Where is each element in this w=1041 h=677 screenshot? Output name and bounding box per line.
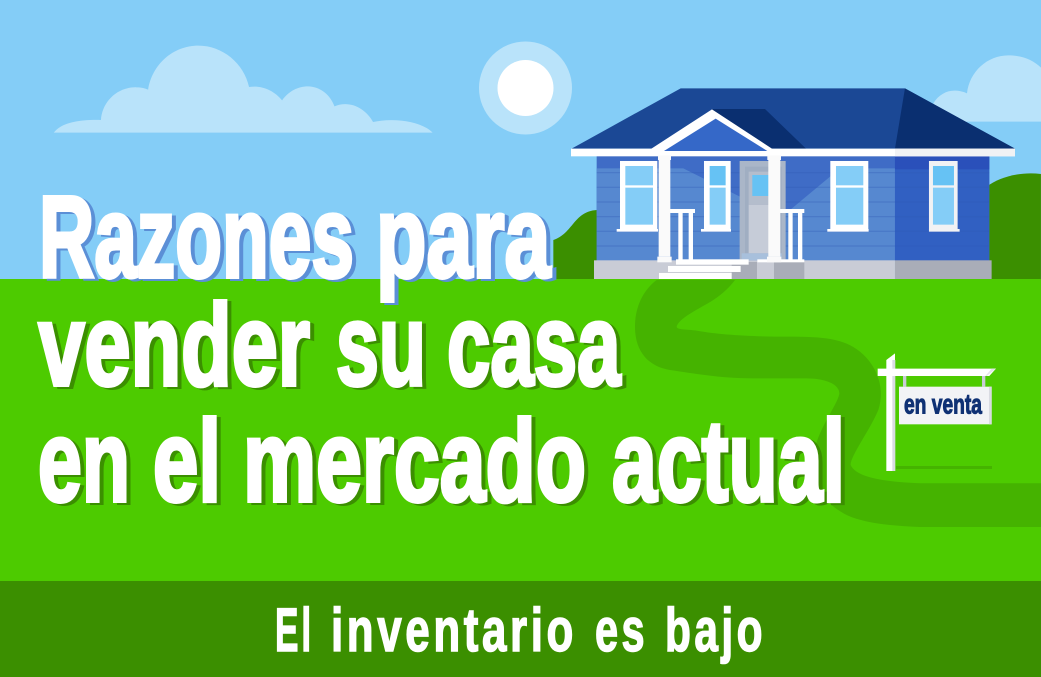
bottom band	[0, 581, 1041, 677]
title line 3: en	[38, 396, 130, 526]
title line 3: mercado	[243, 396, 586, 526]
title line 3: el	[153, 396, 221, 526]
title line 1: para	[376, 172, 552, 302]
door	[740, 161, 786, 260]
window 3	[827, 161, 869, 232]
foundation	[594, 260, 895, 280]
subtitle: inventario	[331, 596, 577, 664]
subtitle: El	[275, 596, 314, 664]
sign post	[886, 353, 895, 471]
window 1	[617, 161, 658, 232]
title line 1: Razones	[39, 172, 354, 302]
sky background	[0, 0, 1041, 280]
title line 2: su	[336, 280, 426, 410]
cloud: left	[54, 46, 433, 133]
for-sale sign	[878, 353, 996, 471]
subtitle	[275, 596, 766, 664]
garden path	[635, 280, 1041, 527]
grass	[0, 279, 1041, 581]
railing right	[757, 209, 804, 262]
porch steps	[659, 259, 749, 280]
title line 2	[38, 280, 621, 410]
sign board	[899, 387, 992, 424]
window 2	[701, 161, 731, 232]
bush: right of house	[987, 173, 1041, 283]
subtitle: es	[595, 596, 648, 664]
eave	[571, 149, 1015, 156]
porch gable	[649, 109, 774, 156]
cloud: right	[933, 55, 1041, 122]
house wall	[597, 156, 989, 261]
bush: left of house	[553, 210, 600, 283]
sun	[479, 42, 572, 134]
house	[571, 88, 1015, 280]
title	[38, 172, 845, 526]
title line 2: vender	[38, 280, 310, 410]
roof	[572, 88, 1015, 149]
window 4	[929, 161, 960, 232]
subtitle: bajo	[665, 596, 766, 664]
title line 3: actual	[612, 396, 845, 526]
sign shadow	[896, 466, 992, 469]
sign arm	[878, 369, 996, 376]
railing left	[670, 209, 695, 260]
title line 2: casa	[447, 280, 621, 410]
sign text: en venta	[904, 389, 983, 420]
title line 3	[38, 396, 845, 526]
columns	[657, 155, 781, 262]
